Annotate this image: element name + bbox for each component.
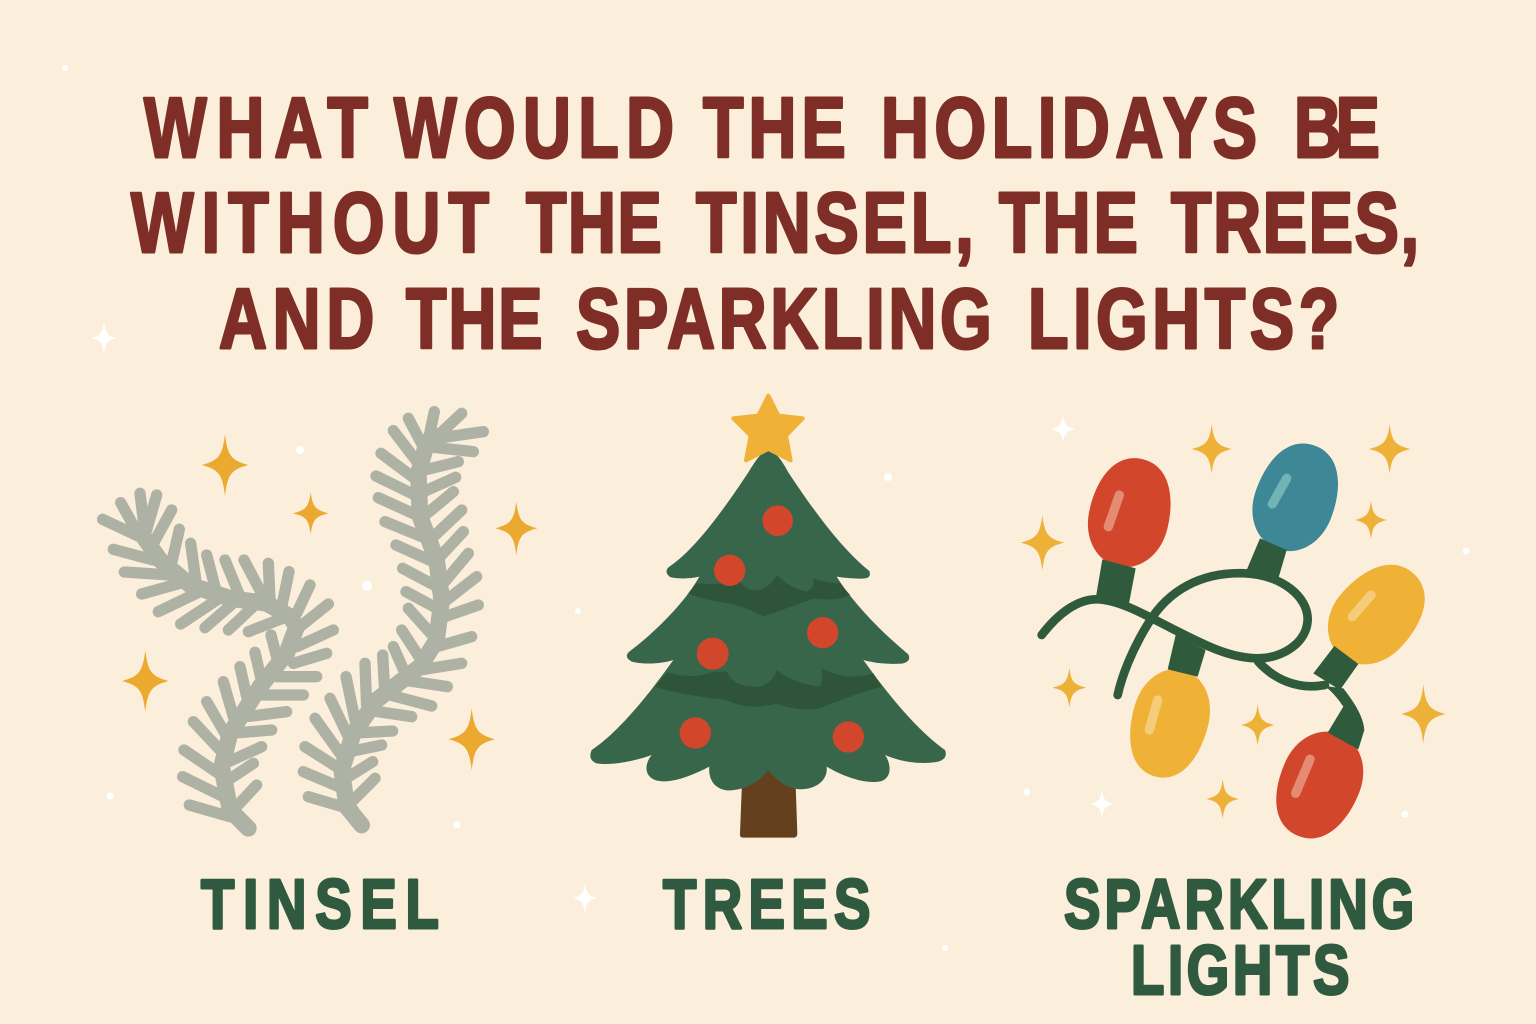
title (131, 81, 1419, 367)
bulb: blue (1240, 432, 1352, 563)
icon: christmas tree (590, 396, 946, 838)
title: TINSEL, (696, 176, 974, 271)
title: THE (703, 81, 846, 176)
label: tinsel: TINSEL (201, 866, 439, 944)
title: HOLIDAYS (881, 81, 1257, 176)
icon: tinsel branches (103, 412, 483, 828)
panel: sparkling lights (1021, 424, 1445, 1010)
title: SPARKLING (576, 272, 992, 367)
label: sparkling lights: SPARKLING (1064, 866, 1414, 944)
title: WOULD (394, 81, 674, 176)
star (733, 396, 803, 460)
sparkles (1021, 424, 1445, 819)
title: AND (219, 272, 374, 367)
background sparkles and snow dots (62, 65, 1470, 951)
bulb: yellow lower (1118, 660, 1220, 786)
title: TREES, (1171, 176, 1419, 271)
sockets (1096, 538, 1364, 749)
bulb: red lower (1261, 719, 1377, 851)
panel: trees (590, 396, 946, 944)
foliage (590, 448, 946, 790)
title: THE (406, 272, 542, 367)
panel: tinsel (103, 412, 537, 944)
trunk (740, 765, 797, 838)
bulb: yellow right (1310, 547, 1443, 682)
title: WITHOUT (131, 176, 489, 271)
label: sparkling lights (1064, 866, 1414, 1010)
title: BE (1294, 81, 1380, 176)
icon: tinsel sparkles (122, 434, 537, 770)
wire (1042, 573, 1325, 695)
baubles (680, 505, 864, 753)
title: LIGHTS? (1028, 272, 1339, 367)
label: sparkling lights: LIGHTS (1131, 932, 1349, 1010)
bulb highlights (1108, 478, 1371, 793)
icon: string of lights (1021, 424, 1445, 851)
title: THE (999, 176, 1138, 271)
title: THE (526, 176, 662, 271)
foliage shadow bands (655, 575, 882, 709)
bulb: red top (1079, 450, 1181, 575)
title: WHAT (144, 81, 368, 176)
label: trees: TREES (663, 866, 870, 944)
